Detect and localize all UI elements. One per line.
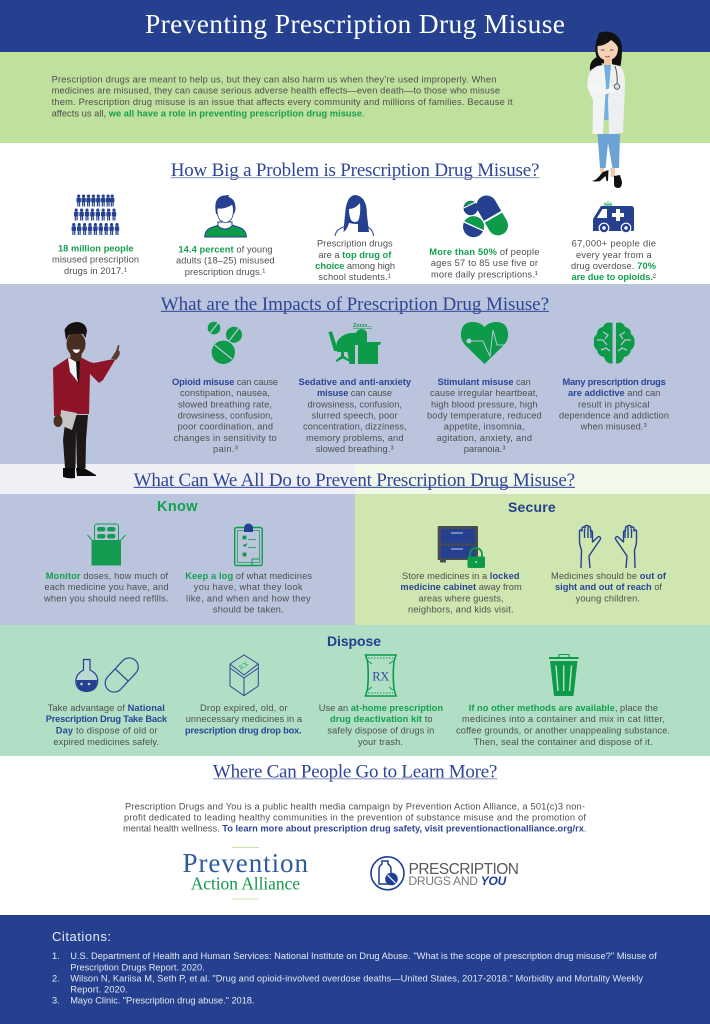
panel: introduction: them. Prescription drug misuse is an issue that affects every community and millions of families. Because it xyxy=(52,97,513,107)
icon: sleeping at desk: Zzzzz... xyxy=(353,323,372,329)
heading: dispose: Dispose xyxy=(327,633,381,649)
text: keep a log: you have, what they look xyxy=(194,582,303,592)
text: addictive xyxy=(559,377,669,432)
text: stimulant misuse: agitation, anxiety, and xyxy=(437,433,532,443)
panel: introduction: medicines are misused, they can cause serious adverse health effects—even death—to those who misuse xyxy=(52,86,500,96)
stat: 18 million xyxy=(52,243,139,276)
stat: more than 50: more daily prescriptions.¹ xyxy=(431,269,538,279)
panel: introduction: affects us all, we all have a role in preventing prescription drug misuse. xyxy=(52,108,365,118)
text: sedative misuse xyxy=(298,377,412,454)
panel: secure xyxy=(355,494,710,625)
text: take back day xyxy=(46,703,168,747)
text: drop box: Drop expired, old, or xyxy=(200,703,288,713)
icon: deactivation kit: RX xyxy=(372,670,389,684)
text: opioid misuse: Opioid misuse can cause xyxy=(172,377,278,387)
stat: 18 million: misused prescription xyxy=(52,254,139,264)
icon: drop box xyxy=(230,655,258,696)
stat: 67,000: are due to opioids.² xyxy=(572,272,656,282)
header band xyxy=(0,0,710,52)
text: campaign description: Prescription Drugs and You is a public health media campaign by Prevention Action Alliance, a 501(c)3 non- xyxy=(125,801,585,811)
text: opioid misuse: constipation, nausea, xyxy=(180,388,270,398)
text: sedative misuse: slurred speech, poor xyxy=(312,410,398,420)
text: stimulant misuse: cause irregular heartbeat, xyxy=(430,388,538,398)
text: deactivation kit: your trash. xyxy=(358,737,403,747)
text: citation 2: 2. xyxy=(52,973,60,983)
text: sedative misuse: slowed breathing.³ xyxy=(316,444,394,454)
figure: businessman xyxy=(53,322,120,478)
icon: ambulance xyxy=(593,201,634,233)
text: sedative misuse: misuse can cause xyxy=(317,388,392,398)
logo: prevention action alliance: Prevention xyxy=(182,848,308,878)
stat: top drug: choice among high xyxy=(315,261,395,271)
stat: 18 million: drugs in 2017.¹ xyxy=(64,266,127,276)
panel: dispose xyxy=(0,625,710,756)
text: stimulant misuse: appetite, insomnia, xyxy=(444,422,524,432)
text: locked cabinet: medicine cabinet away from xyxy=(400,582,522,592)
text: campaign description: mental health wellness. To learn more about prescription drug safety, visit preventionactionalliance.org/rx. xyxy=(123,824,586,834)
text: citation 1 xyxy=(52,951,657,972)
text: campaign description: profit dedicated to leading healthy communities in the prevention of substance misuse and the promotion of xyxy=(124,812,586,822)
text: keep a log: should be taken. xyxy=(213,604,284,614)
text: citation 1: 1. xyxy=(52,951,60,961)
stat: more than 50 xyxy=(429,247,539,279)
figure: doctor xyxy=(587,32,625,188)
text: monitor: Monitor doses, how much of xyxy=(46,571,168,581)
text: citation 2: Wilson N, Kariisa M, Seth P, et al. "Drug and opioid-involved overdose deaths—United States, 2017-2018." Morbidity and Mortality Weekly xyxy=(70,973,643,983)
text: keep a log xyxy=(185,571,312,614)
text: opioid misuse: slowed breathing rate, xyxy=(178,399,272,409)
text: monitor: each medicine you have, and xyxy=(44,582,168,592)
stat: top drug: are a top drug of xyxy=(318,250,392,260)
text: deactivation kit: safely dispose of drugs in xyxy=(327,726,434,736)
panel: know xyxy=(0,494,355,625)
icon: sleeping at desk xyxy=(328,323,381,364)
text: opioid misuse: drowsiness, confusion, xyxy=(178,410,273,420)
heading: impacts: What are the Impacts of Prescription Drug Misuse? xyxy=(161,294,549,315)
panel: citations xyxy=(0,915,710,1024)
text: campaign description xyxy=(123,801,586,834)
stat: 14.4 percent xyxy=(176,244,274,277)
text: stimulant misuse: Stimulant misuse can xyxy=(438,377,531,387)
stat: 67,000 xyxy=(571,238,657,282)
icon: heart with pulse xyxy=(461,322,508,364)
logo: prescription drugs and you xyxy=(371,857,519,890)
stat: 14.4 percent: prescription drugs.¹ xyxy=(185,267,265,277)
icon: trash can xyxy=(549,654,578,696)
text: household trash: If no other methods are available, place the xyxy=(469,703,658,713)
text: opioid misuse xyxy=(172,377,278,454)
icon: pills xyxy=(463,192,512,239)
logo: prescription drugs and you: PRESCRIPTION xyxy=(408,861,519,878)
panel: impacts xyxy=(0,284,710,464)
text: deactivation kit: Use an at-home prescription xyxy=(319,703,443,713)
stat: top drug: Prescription drugs xyxy=(317,238,393,248)
stat: 18 million: 18 million people xyxy=(58,243,134,253)
text: stimulant misuse: paranoia.³ xyxy=(464,444,505,454)
icon: drop box: RX xyxy=(237,660,250,672)
icon: raised hands xyxy=(580,526,636,568)
heading: what can we do: What Can We All Do to Prevent Prescription Drug Misuse? xyxy=(134,470,575,491)
icon: young adult xyxy=(205,195,246,237)
text: stimulant misuse xyxy=(427,377,542,454)
heading: know: Know xyxy=(157,499,198,515)
panel: what can we do band xyxy=(0,464,710,494)
text: stimulant misuse: high blood pressure, high xyxy=(431,399,538,409)
icon: capsule xyxy=(101,654,142,696)
text: out of reach: young children. xyxy=(576,594,640,604)
stat: top drug: school students.¹ xyxy=(318,272,391,282)
icon: locked cabinet xyxy=(438,526,485,568)
logo: prevention action alliance: Action Alliance xyxy=(191,874,300,894)
icon: clipboard log xyxy=(235,524,262,566)
text: opioid misuse: pain.³ xyxy=(213,444,238,454)
text: take back day: Day to dispose of old or xyxy=(56,726,158,736)
icon: crowd of people xyxy=(72,194,119,235)
heading: learn more: Where Can People Go to Learn More? xyxy=(213,762,497,782)
panel: introduction: Prescription drugs are meant to help us, but they can also harm us when they’re used improperly. When xyxy=(52,74,496,84)
text: citation 1: U.S. Department of Health and Human Services: National Institute on Drug Abuse. "What is the scope of prescription drug misuse?" Misuse of xyxy=(70,951,657,961)
icon: deactivation kit xyxy=(366,655,396,696)
icon: medicine pack in box xyxy=(88,524,126,566)
title: Preventing Prescription Drug Misuse xyxy=(145,8,565,39)
text: opioid misuse: poor coordination, and xyxy=(178,422,273,432)
text: addictive: when misused.³ xyxy=(580,422,647,432)
icon: brain xyxy=(594,322,635,364)
logo: prevention action alliance xyxy=(182,847,308,900)
text: out of reach: sight and out of reach of xyxy=(555,582,662,592)
stat: 14.4 percent: 14.4 percent of young xyxy=(178,244,273,254)
text: citation 1: Prescription Drugs Report. 2020. xyxy=(70,962,205,972)
stat: top drug xyxy=(315,238,395,282)
icon: flask xyxy=(76,660,98,692)
text: drop box xyxy=(185,703,303,736)
text: deactivation kit: drug deactivation kit to xyxy=(330,714,432,724)
text: addictive: result in physical xyxy=(578,399,650,409)
stat: 67,000: 67,000+ people die xyxy=(572,238,656,248)
icon: young woman xyxy=(335,195,374,236)
stat: 14.4 percent: adults (18–25) misused xyxy=(176,256,274,266)
text: take back day: Prescription Drug Take Back xyxy=(46,714,168,724)
stat: more than 50: More than 50% of people xyxy=(429,247,539,257)
text: addictive: are addictive and can xyxy=(568,388,660,398)
text: sedative misuse: drowsiness, confusion, xyxy=(308,399,402,409)
text: take back day: Take advantage of National xyxy=(48,703,165,713)
panel: how big a problem xyxy=(0,143,710,284)
panel: learn more xyxy=(0,756,710,915)
heading: citations: Citations: xyxy=(52,929,111,944)
text: citation 2: Report. 2020. xyxy=(70,985,128,995)
text: deactivation kit xyxy=(319,703,443,747)
text: take back day: expired medicines safely. xyxy=(53,737,159,747)
text: out of reach xyxy=(551,571,667,604)
text: monitor: when you should need refills. xyxy=(43,594,168,604)
icon: opioid pills xyxy=(208,322,242,364)
text: monitor xyxy=(43,571,168,604)
text: locked cabinet xyxy=(400,571,522,614)
text: addictive: dependence and addiction xyxy=(559,410,669,420)
text: drop box: unnecessary medicines in a xyxy=(186,714,303,724)
text: stimulant misuse: body temperature, reduced xyxy=(427,410,542,420)
text: keep a log: Keep a log of what medicines xyxy=(185,571,312,581)
text: household trash: Then, seal the container and dispose of it. xyxy=(474,737,653,747)
text: sedative misuse: concentration, dizziness, xyxy=(303,422,407,432)
stat: 67,000: drug overdose. 70% xyxy=(571,261,657,271)
text: keep a log: like, and when and how they xyxy=(186,594,311,604)
text: household trash xyxy=(456,703,670,747)
logo: prescription drugs and you: DRUGS AND YOU xyxy=(408,874,507,888)
text: household trash: medicines into a container and mix in cat litter, xyxy=(462,714,665,724)
stat: 67,000: every year from a xyxy=(576,250,653,260)
text: locked cabinet: neighbors, and kids visit. xyxy=(408,604,514,614)
text: sedative misuse: memory problems, and xyxy=(306,433,404,443)
text: drop box: prescription drug drop box. xyxy=(185,726,302,736)
text: citation 3: Mayo Clinic. "Prescription drug abuse." 2018. xyxy=(70,996,254,1006)
text: household trash: coffee grounds, or another unappealing substance. xyxy=(456,726,670,736)
text: opioid misuse: changes in sensitivity to xyxy=(174,433,277,443)
text: citation 3: 3. xyxy=(52,996,60,1006)
heading: how big: How Big a Problem is Prescription Drug Misuse? xyxy=(171,160,539,181)
text: citation 2 xyxy=(52,973,643,995)
stat: more than 50: ages 57 to 85 use five or xyxy=(431,258,538,268)
heading: secure: Secure xyxy=(508,499,556,515)
panel: introduction xyxy=(0,52,710,143)
text: locked cabinet: Store medicines in a locked xyxy=(402,571,520,581)
text: addictive: Many prescription drugs xyxy=(562,377,666,387)
text: sedative misuse: Sedative and anti-anxiety xyxy=(298,377,412,387)
text: locked cabinet: areas where guests, xyxy=(418,594,504,604)
text: out of reach: Medicines should be out of xyxy=(551,571,667,581)
